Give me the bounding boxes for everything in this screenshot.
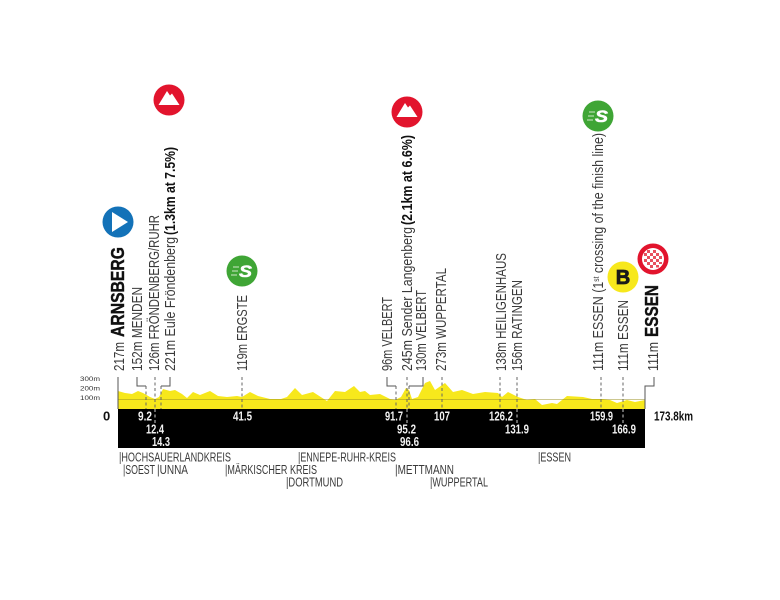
region labels: |UNNA (157, 463, 189, 477)
total distance: 173.8km (654, 408, 693, 424)
distance numbers: 96.6 (400, 434, 419, 449)
label: Eule Fröndenberg climb: (1.3km at 7.5%) (162, 147, 179, 235)
label: Velbert 130m: 130m VELBERT (413, 290, 430, 371)
region labels: |ESSEN (538, 450, 571, 464)
altitude scale: 300m (80, 377, 100, 383)
label: Essen first crossing: st (592, 276, 601, 282)
altitude scale (80, 377, 100, 402)
label: Wuppertal: 273m WUPPERTAL (433, 268, 450, 371)
label: Ergste: 119m ERGSTE (234, 295, 251, 371)
distance numbers: 166.9 (612, 422, 636, 436)
label: Fröndenberg/Ruhr: 126m FRÖNDENBERG/RUHR (145, 215, 163, 371)
distance numbers: 9.2 (138, 408, 152, 424)
label: Menden: 152m MENDEN (129, 287, 146, 371)
region labels: |HOCHSAUERLANDKREIS (119, 450, 231, 464)
label: Essen bonus: 111m ESSEN (615, 300, 632, 371)
finish label: Essen: ESSEN (642, 285, 662, 337)
icon: bonus B: B (616, 267, 630, 289)
region labels: |SOEST (123, 463, 155, 477)
distance numbers: 107 (434, 408, 450, 424)
distance numbers: 12.4 (146, 422, 165, 436)
region labels: |DORTMUND (286, 476, 343, 490)
black distance band (118, 409, 645, 448)
distance numbers: 159.9 (590, 408, 613, 424)
icon: bonus B (608, 262, 638, 292)
region labels: |METTMANN (395, 463, 454, 477)
distance numbers: 131.9 (505, 422, 529, 436)
altitude scale: 100m (80, 396, 100, 402)
distance numbers: 14.3 (152, 434, 170, 449)
region labels: |WUPPERTAL (430, 476, 488, 490)
distance numbers: 41.5 (233, 408, 252, 424)
finish label: Essen: 111m (645, 342, 662, 371)
start label: Arnsberg: ARNSBERG (108, 247, 128, 337)
label: Essen first crossing: 111m ESSEN (1 (590, 263, 607, 371)
start label: Arnsberg: 217m (111, 342, 128, 371)
distance numbers: 126.2 (489, 408, 513, 424)
leader lines (118, 377, 654, 423)
label: Essen first crossing: crossing of the finish line) (590, 133, 607, 277)
icon: sprint Essen: S (595, 107, 609, 126)
altitude scale: 200m (80, 386, 100, 392)
distance numbers: 91.7 (385, 408, 403, 424)
icon: sprint Ergste (226, 256, 258, 286)
icon: finish flag (638, 244, 668, 274)
distance numbers (138, 408, 636, 449)
region labels: |ENNEPE-RUHR-KREIS (298, 450, 396, 464)
icon: sprint Essen (582, 100, 614, 132)
distance numbers: 95.2 (397, 422, 416, 436)
icon: sprint Ergste: S (239, 262, 253, 281)
label: Sender Langenberg climb: 245m Sender Langenberg (399, 227, 416, 371)
elevation profile (118, 381, 645, 409)
zero label: 0 (103, 408, 110, 424)
icon: start (102, 206, 134, 238)
label: Sender Langenberg climb: (2.1km at 6.6%) (399, 135, 416, 225)
start label: Arnsberg (108, 247, 128, 371)
finish label: Essen (642, 285, 662, 371)
label: Velbert 96m: 96m VELBERT (379, 297, 396, 371)
label: Eule Fröndenberg climb: 221m Eule Fröndenberg (162, 237, 179, 371)
icon: climb 2 (392, 96, 422, 128)
icon: climb 1 (154, 84, 184, 116)
label: Heiligenhaus: 138m HEILIGENHAUS (493, 253, 510, 371)
region labels: |MÄRKISCHER KREIS (225, 463, 317, 477)
label: Ratingen: 156m RATINGEN (509, 280, 526, 371)
region labels (119, 450, 571, 490)
